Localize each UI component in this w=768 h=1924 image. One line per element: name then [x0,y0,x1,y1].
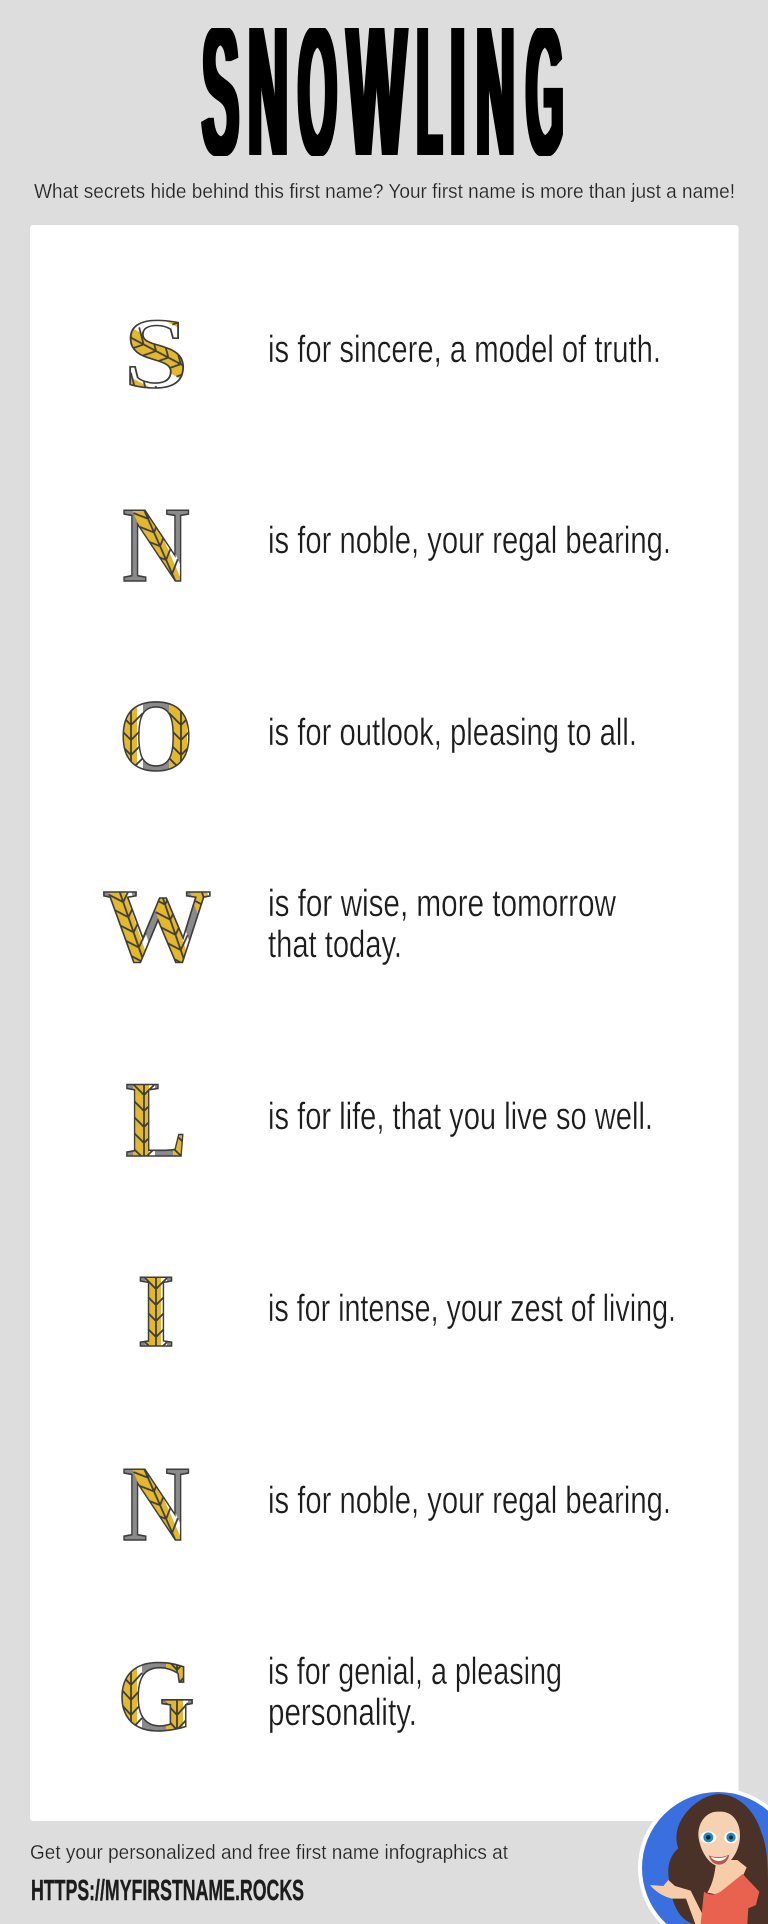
text: G lines [268,1651,562,1734]
avatar neck and chest [707,1860,747,1895]
footer url: HTTPS://MYFIRSTNAME.ROCKS [31,1875,304,1907]
avatar hair [668,1794,768,1924]
avatar eyes [700,1831,738,1843]
text: W lines [268,883,616,966]
icon: letter N [123,510,190,582]
icon: letter S: S [124,297,188,409]
text: W lines: is for wise, more tomorrow [268,883,616,925]
icon: letter O: O [118,678,194,793]
text: O line: is for outlook, pleasing to all. [268,712,637,754]
panel: letter list [30,225,738,1821]
icon: letter I [140,1276,172,1347]
title [201,28,563,156]
text: L line: is for life, that you live so well. [268,1096,653,1138]
icon: letter I: I [137,1252,175,1369]
avatar face [698,1812,740,1866]
icon: letter G: G [117,1639,195,1752]
avatar shirt [701,1874,759,1924]
avatar mouth [709,1855,729,1865]
icon: letter W [103,891,211,964]
text: G lines: personality. [268,1692,417,1734]
icon: letter N second: N [122,1444,190,1564]
text: W lines: that today. [268,924,402,966]
icon: letter O [122,701,190,772]
text: S line: is for sincere, a model of truth. [268,329,661,371]
icon: letter L: L [125,1059,187,1180]
avatar arm and hand [650,1880,707,1924]
text: G lines: is for genial, a pleasing [268,1651,562,1693]
icon: letter L [126,1084,184,1157]
avatar [640,1790,768,1924]
icon: letter S [129,320,184,389]
icon: letter W: W [102,869,212,985]
icon: letter G [121,1662,193,1732]
footer text: Get your personalized and free first name infographics at [30,1842,508,1864]
icon: letter N: N [122,485,190,605]
icon: letter N second [123,1468,190,1541]
subtitle: What secrets hide behind this first name? Your first name is more than just a name! [34,181,735,203]
